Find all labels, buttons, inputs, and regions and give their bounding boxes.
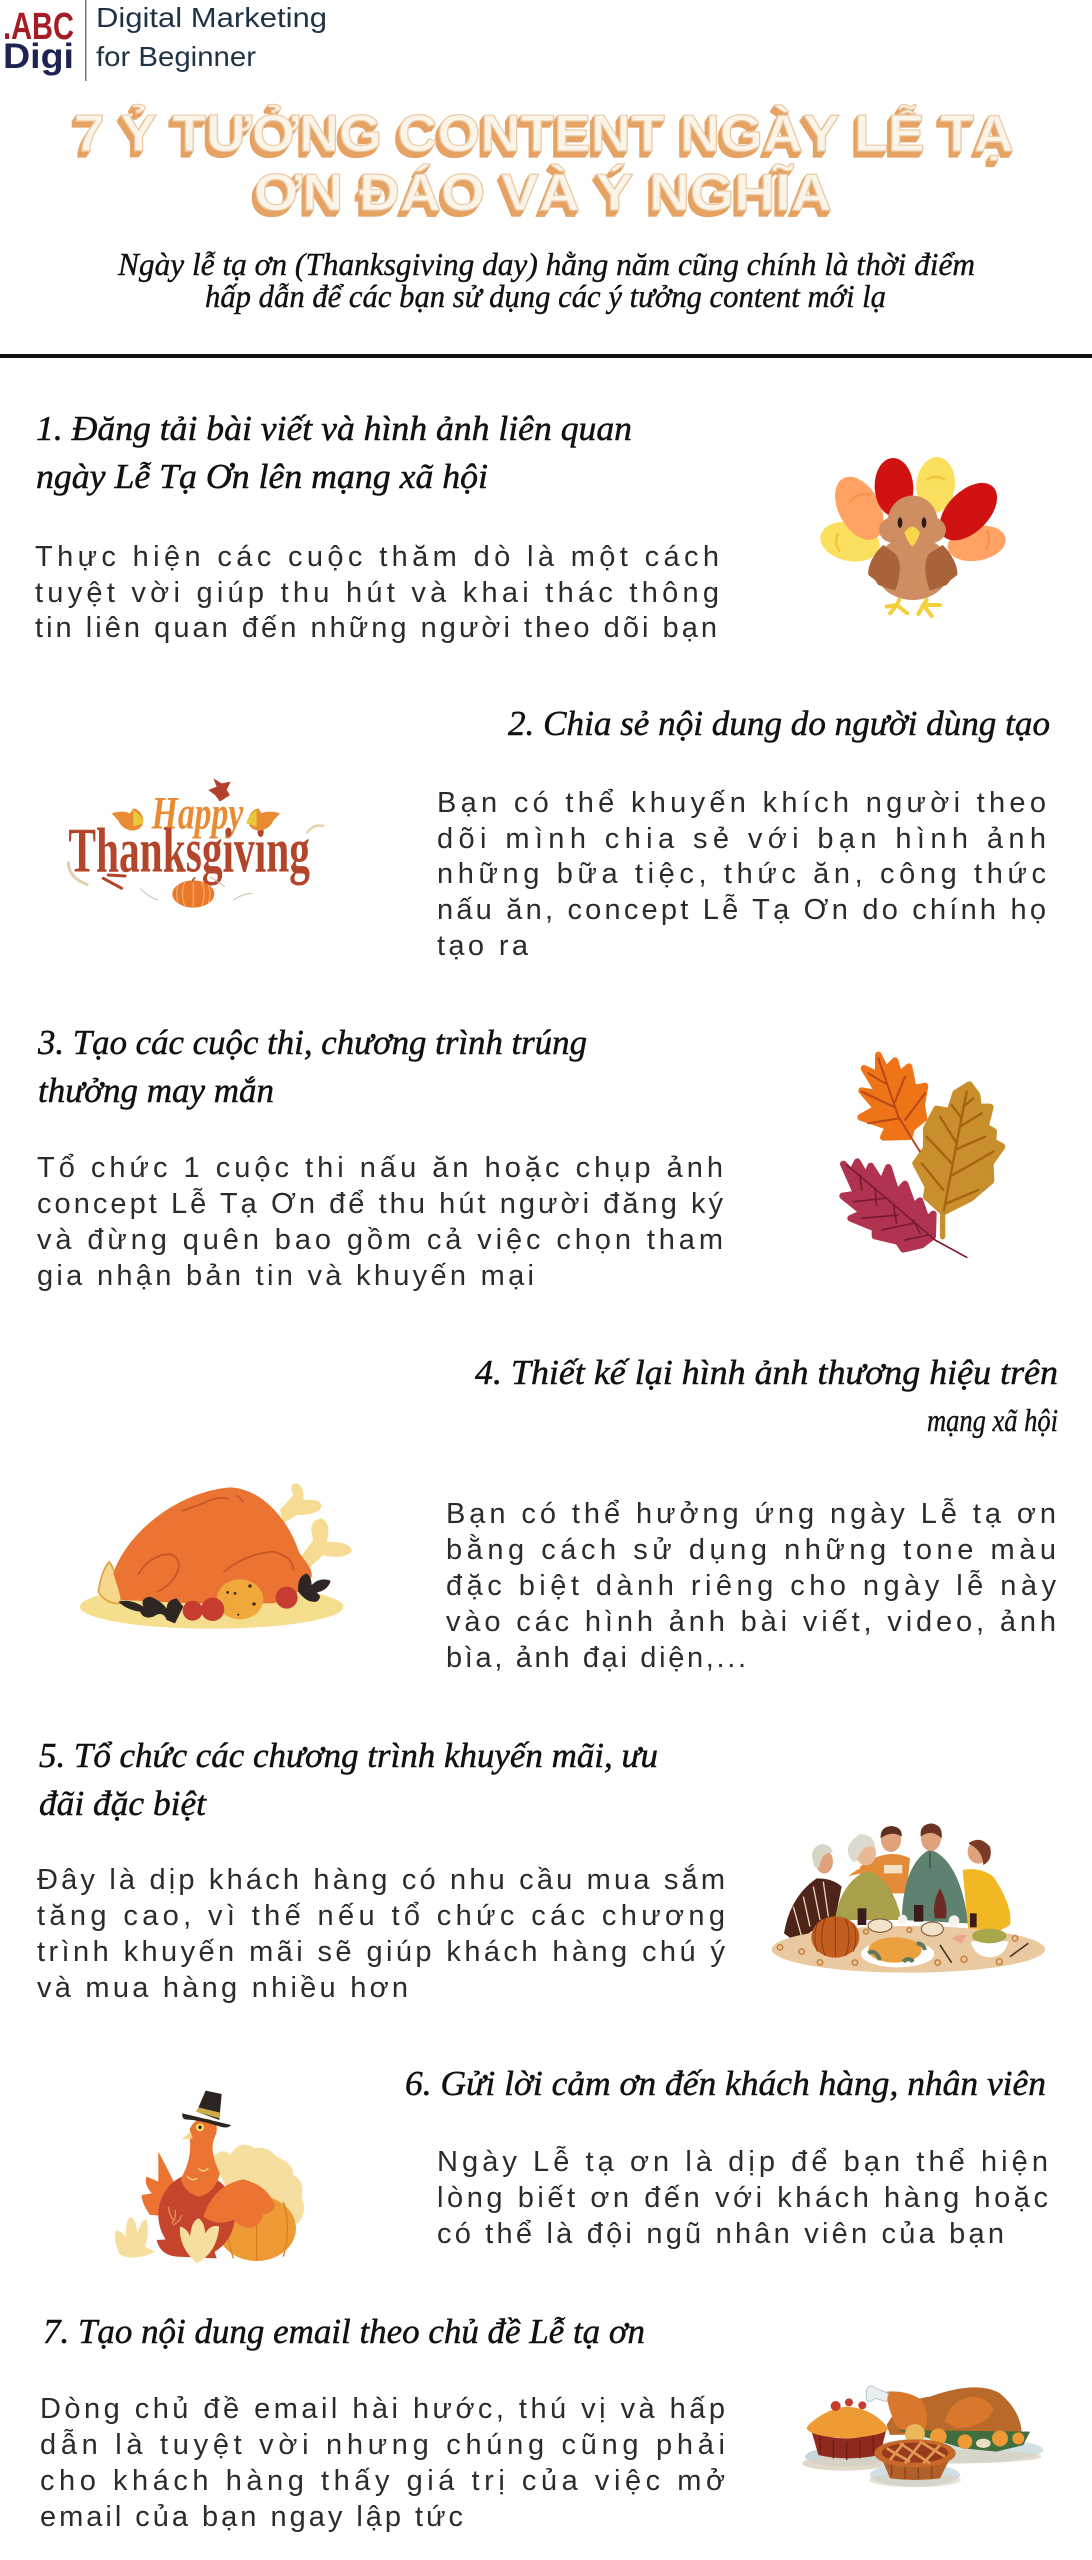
heading 3: thưởng may mắn: [38, 1071, 274, 1110]
body 6: có thể là đội ngũ nhân viên của bạn: [437, 2218, 1004, 2250]
person: boy in orange: [860, 1826, 910, 1893]
body 4: Bạn có thể hưởng ứng ngày Lễ tạ ơn: [446, 1497, 1056, 1530]
logo: ABC Digi: Digi: [3, 37, 74, 76]
heading 6: 6. Gửi lời cảm ơn đến khách hàng, nhân viên: [405, 2064, 1046, 2103]
heading 3: 3. Tạo các cuộc thi, chương trình trúng: [37, 1023, 587, 1062]
icon: family at dinner table: [772, 1823, 1045, 1973]
body 1: tin liên quan đến những người theo dõi bạn: [35, 612, 717, 644]
heading 4: mạng xã hội: [927, 1402, 1058, 1438]
body 7: email của bạn ngay lập tức: [40, 2501, 463, 2533]
section 2: [68, 704, 1050, 962]
title: ƠN ĐÁO VÀ Ý NGHĨA: [254, 163, 832, 222]
body 2: [437, 787, 1046, 962]
heading 5: 5. Tổ chức các chương trình khuyến mãi, ưu: [39, 1736, 658, 1775]
heading 3: [37, 1023, 587, 1110]
icon: Happy Thanksgiving lettering: [68, 778, 324, 908]
body 4: đặc biệt dành riêng cho ngày lễ này: [446, 1569, 1056, 1602]
body 4: bằng cách sử dụng những tone màu: [446, 1533, 1056, 1566]
body 7: dẫn là tuyệt vời nhưng chúng cũng phải: [40, 2428, 725, 2461]
body 2: Bạn có thể khuyến khích người theo: [437, 787, 1046, 819]
icon: Happy Thanksgiving lettering: Happy: [151, 787, 244, 839]
body 3: concept Lễ Tạ Ơn để thu hút người đăng ký: [37, 1187, 724, 1220]
body 1: Thực hiện các cuộc thăm dò là một cách: [35, 541, 719, 573]
body 3: gia nhận bản tin và khuyến mại: [37, 1260, 534, 1292]
heading 5: đãi đặc biệt: [39, 1784, 207, 1823]
heading 7: 7. Tạo nội dung email theo chủ đề Lễ tạ ơn: [43, 2312, 645, 2351]
icon: roast turkey and pies: [802, 2386, 1043, 2487]
logo: ABC Digi: Digital Marketing: [96, 2, 327, 33]
heading 5: [39, 1736, 658, 1823]
section 4: [80, 1353, 1058, 1674]
heading 4: 4. Thiết kế lại hình ảnh thương hiệu trên: [475, 1353, 1058, 1392]
body 2: nấu ăn, concept Lễ Tạ Ơn do chính họ: [437, 893, 1046, 926]
body 7: [40, 2393, 725, 2533]
body 4: vào các hình ảnh bài viết, video, ảnh: [446, 1606, 1056, 1638]
title: [74, 104, 1014, 222]
title: 7 Ỷ TƯỞNG CONTENT NGÀY LỄ TẠ: [74, 104, 1014, 163]
heading 1: 1. Đăng tải bài viết và hình ảnh liên quan: [36, 409, 632, 448]
icon: cartoon turkey: [817, 455, 1009, 616]
heading 1: [36, 409, 632, 496]
heading 4: [475, 1353, 1058, 1438]
body 1: [35, 541, 719, 644]
body 7: cho khách hàng thấy giá trị của việc mở: [40, 2465, 725, 2497]
subtitle: [117, 246, 975, 314]
icon: Happy Thanksgiving lettering: Thanksgiving: [68, 816, 310, 886]
roast turkey platter: [861, 1937, 934, 1967]
section 7: [40, 2312, 1043, 2533]
section 5: [37, 1736, 1045, 2004]
body 5: [37, 1863, 726, 2004]
subtitle: hấp dẫn để các bạn sử dụng các ý tưởng content mới lạ: [205, 278, 886, 314]
person: woman in yellow: [963, 1840, 1010, 1940]
body 6: lòng biết ơn đến với khách hàng hoặc: [437, 2182, 1048, 2214]
body 5: trình khuyến mãi sẽ giúp khách hàng chú ý: [37, 1936, 726, 1968]
body 5: tăng cao, vì thế nếu tổ chức các chương: [37, 1900, 725, 1932]
icon: autumn leaves: [843, 1055, 1002, 1257]
heading 1: ngày Lễ Tạ Ơn lên mạng xã hội: [36, 457, 488, 496]
body 2: những bữa tiệc, thức ăn, công thức: [437, 858, 1046, 890]
heading 2: 2. Chia sẻ nội dung do người dùng tạo: [508, 704, 1050, 743]
section 3: [37, 1023, 1002, 1292]
logo: ABC Digi: .ABC: [3, 6, 74, 48]
body 6: [437, 2145, 1048, 2250]
logo: ABC Digi: [3, 0, 327, 81]
body 2: tạo ra: [437, 930, 529, 962]
person: grandmother in olive: [835, 1834, 902, 1920]
salad bowl: [971, 1929, 1008, 1957]
logo: ABC Digi: for Beginner: [96, 41, 256, 72]
body 3: [37, 1152, 724, 1292]
person: grandmother in stripes: [784, 1844, 842, 1943]
icon: pilgrim turkey with pumpkin: [115, 2091, 304, 2263]
section 1: [35, 409, 1009, 644]
body 3: và đừng quên bao gồm cả việc chọn tham: [37, 1224, 723, 1256]
body 2: dõi mình chia sẻ với bạn hình ảnh: [437, 823, 1046, 855]
pumpkin: [811, 1916, 859, 1958]
body 3: Tổ chức 1 cuộc thi nấu ăn hoặc chụp ảnh: [37, 1152, 723, 1184]
subtitle: Ngày lễ tạ ơn (Thanksgiving day) hằng năm cũng chính là thời điểm: [117, 246, 975, 282]
body 7: Dòng chủ đề email hài hước, thú vị và hấp: [40, 2393, 725, 2425]
body 4: bìa, ảnh đại diện,...: [446, 1642, 746, 1674]
body 5: và mua hàng nhiều hơn: [37, 1972, 408, 2004]
icon: roast chicken on platter: [80, 1483, 352, 1629]
dinner table: [772, 1926, 1045, 1973]
body 6: Ngày Lễ tạ ơn là dịp để bạn thể hiện: [437, 2145, 1048, 2178]
body 5: Đây là dịp khách hàng có nhu cầu mua sắm: [37, 1863, 725, 1896]
body 4: [446, 1497, 1056, 1674]
section 6: [115, 2064, 1048, 2263]
person: man in green: [902, 1823, 968, 1923]
body 1: tuyệt vời giúp thu hút và khai thác thông: [35, 577, 719, 609]
